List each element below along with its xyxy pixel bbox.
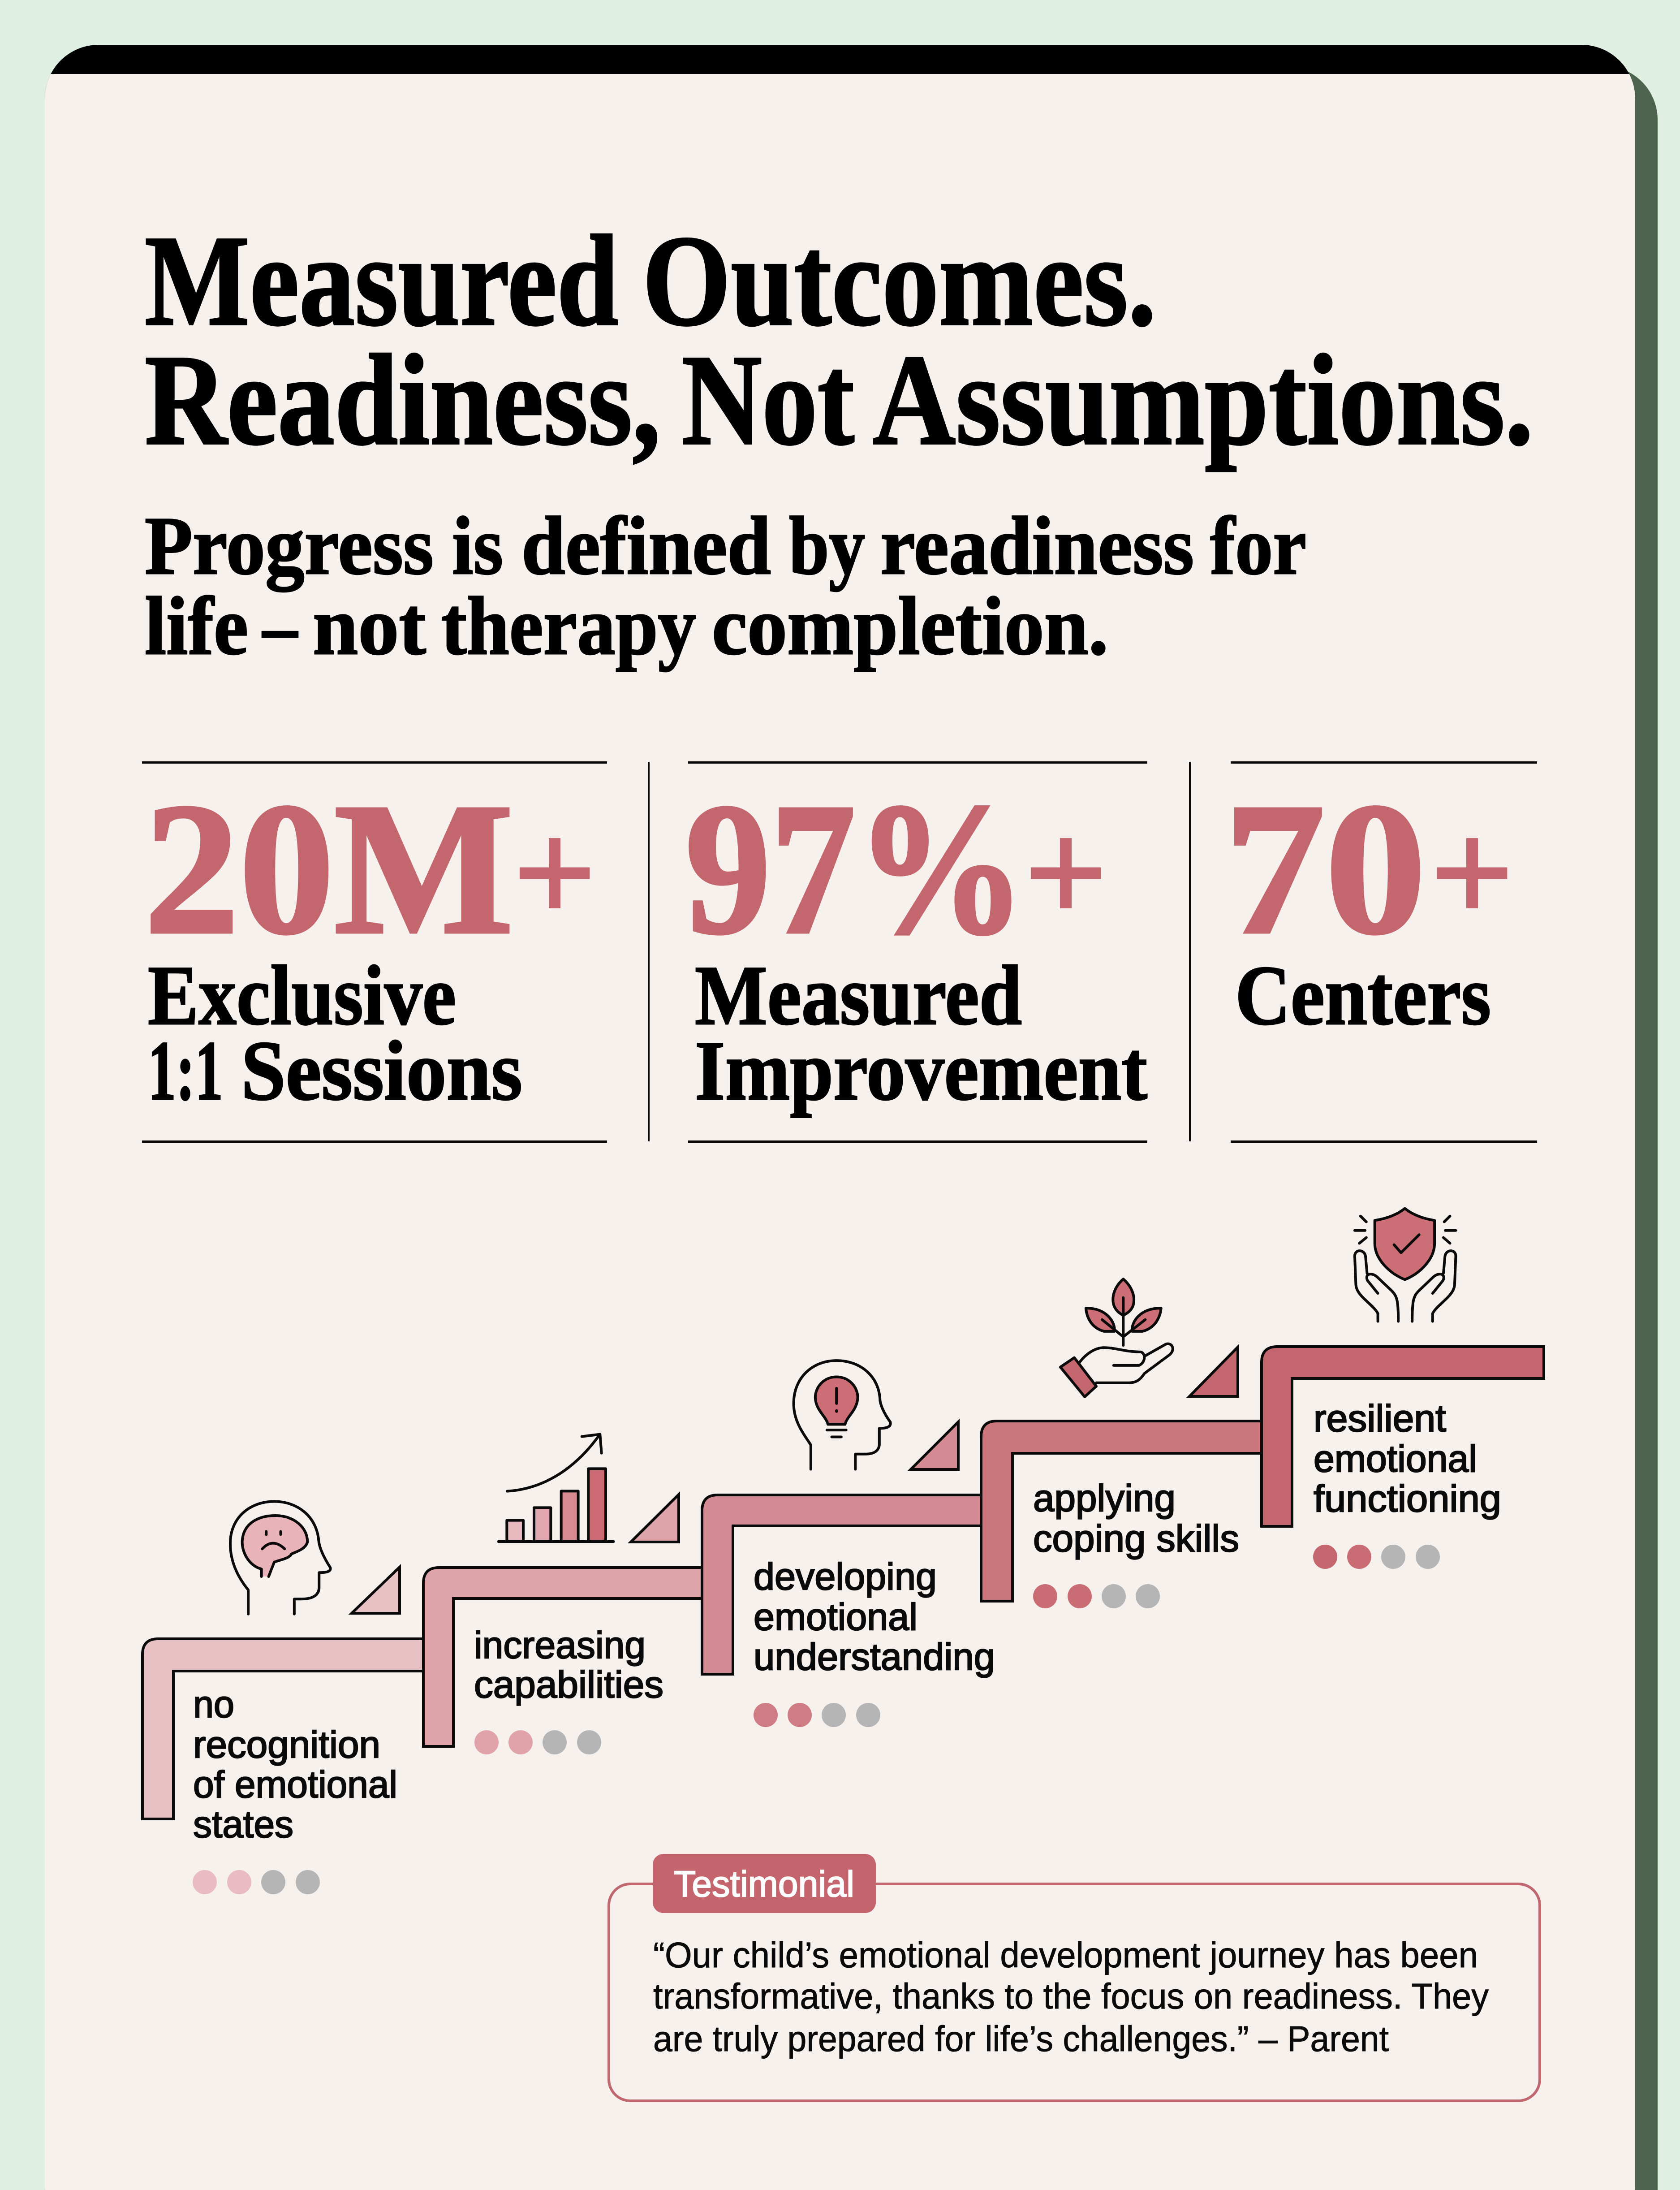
- progress dots: step 4: [1033, 1584, 1160, 1608]
- staircase: [142, 1347, 1544, 1819]
- divider: [1189, 762, 1191, 1141]
- testimonial quote: [653, 1935, 1489, 2059]
- label: step 4: applying: [1033, 1477, 1176, 1519]
- subtitle: by: [789, 500, 865, 592]
- stat: 97%+: Improvement: [695, 1024, 1147, 1118]
- stat: 97%+: +: [1024, 791, 1108, 955]
- title: Not: [682, 328, 856, 472]
- testimonial quote: “Our child’s emotional development journey has been: [653, 1935, 1478, 1975]
- progress dots: step 1: [193, 1870, 320, 1894]
- title: Assumptions.: [873, 328, 1534, 472]
- label: step 5: emotional: [1314, 1438, 1477, 1480]
- label: step 5: functioning: [1314, 1477, 1501, 1520]
- icon: rising bar chart: [499, 1434, 613, 1542]
- subtitle: Progress: [145, 500, 434, 592]
- label: step 5: [1314, 1397, 1501, 1520]
- triangle 1: [352, 1567, 400, 1613]
- subtitle: –: [262, 580, 298, 672]
- label: step 1: of emotional: [193, 1763, 397, 1806]
- stat: 20M+: Sessions: [241, 1024, 522, 1118]
- label: step 1: [193, 1683, 397, 1845]
- panel: testimonial: [609, 1854, 1540, 2101]
- label: step 3: [754, 1555, 995, 1678]
- testimonial tag: Testimonial: [674, 1864, 854, 1905]
- triangle 4: [1189, 1347, 1238, 1396]
- subtitle: defined: [521, 500, 771, 592]
- step 1 bar: [142, 1639, 423, 1819]
- subtitle: completion.: [712, 580, 1108, 672]
- stat: 20M+: +: [513, 791, 597, 955]
- stat: 70+: 70: [1224, 765, 1426, 973]
- label: step 2: increasing: [474, 1624, 646, 1666]
- label: step 3: emotional: [754, 1596, 918, 1638]
- stat: 70+: [1224, 761, 1537, 1143]
- stat: 20M+: 20M: [144, 765, 513, 973]
- step 5 bar: [1262, 1347, 1544, 1526]
- subtitle: is: [452, 500, 503, 592]
- subtitle: life: [145, 580, 248, 672]
- stat: 20M+: 1:1: [148, 1024, 223, 1118]
- step 4 bar: [981, 1421, 1262, 1601]
- triangle 2: [631, 1495, 679, 1542]
- icon: head with sad brain: [230, 1501, 331, 1614]
- title: Measured: [145, 209, 619, 353]
- stat: 70+: +: [1430, 791, 1514, 955]
- stat: 20M+: Exclusive: [148, 949, 456, 1043]
- testimonial quote: are truly prepared for life’s challenges.” – Parent: [653, 2019, 1389, 2059]
- step 2 bar: [423, 1568, 703, 1746]
- label: step 1: states: [193, 1803, 293, 1845]
- label: step 3: understanding: [754, 1636, 995, 1678]
- icon: hands with shield: [1355, 1209, 1456, 1322]
- subtitle: for: [1210, 500, 1306, 592]
- subtitle: readiness: [880, 500, 1194, 592]
- label: step 2: [474, 1624, 663, 1706]
- title: [145, 209, 1534, 472]
- stat: 20M+: [142, 761, 607, 1143]
- stat: 97%+: [685, 761, 1147, 1143]
- icon: hand holding plant: [1060, 1279, 1173, 1397]
- progress dots: step 3: [754, 1703, 880, 1727]
- progress dots: step 2: [474, 1730, 601, 1754]
- label: step 5: resilient: [1314, 1397, 1446, 1439]
- label: step 3: developing: [754, 1555, 937, 1598]
- icon: head with lightbulb: [794, 1361, 891, 1469]
- stat: 70+: Centers: [1235, 949, 1491, 1043]
- progress dots: step 5: [1313, 1545, 1440, 1569]
- label: step 1: recognition: [193, 1723, 380, 1766]
- divider: [648, 762, 650, 1141]
- triangle 3: [911, 1422, 958, 1469]
- subtitle: therapy: [441, 580, 696, 672]
- title: Readiness,: [145, 328, 661, 472]
- stat: 97%+: 97%: [685, 765, 1026, 973]
- label: step 4: coping skills: [1033, 1517, 1239, 1559]
- stat: 97%+: Measured: [695, 949, 1022, 1043]
- label: step 4: [1033, 1477, 1239, 1559]
- subtitle: [145, 500, 1306, 672]
- testimonial tag: [653, 1854, 876, 1913]
- label: step 2: capabilities: [474, 1663, 663, 1706]
- step 3 bar: [702, 1495, 982, 1674]
- label: step 1: no: [193, 1683, 234, 1725]
- testimonial quote: transformative, thanks to the focus on readiness. They: [653, 1976, 1489, 2016]
- subtitle: not: [313, 580, 426, 672]
- title: Outcomes.: [642, 209, 1156, 353]
